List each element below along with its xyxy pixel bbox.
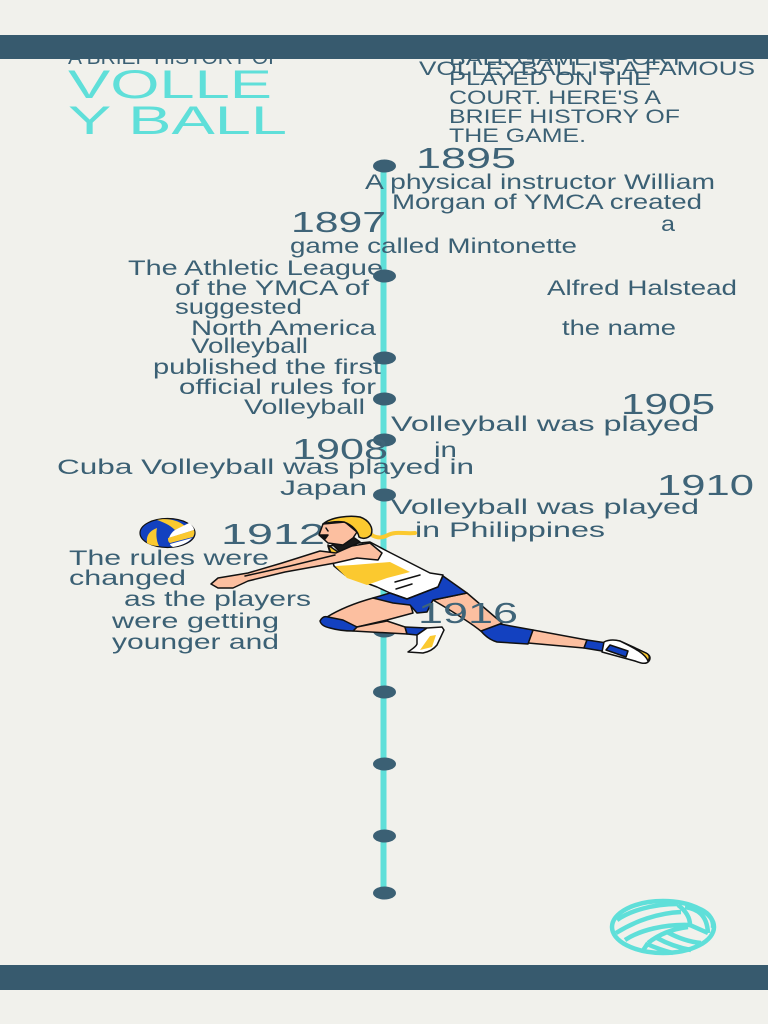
event 1897: Alfred Halstead xyxy=(547,277,737,300)
event 1895: Morgan of YMCA created xyxy=(392,191,702,214)
hair xyxy=(323,516,372,538)
event 1897: Volleyball xyxy=(244,396,365,419)
intro text block: THE GAME. xyxy=(449,125,586,147)
title: a brief history of volleyball: VOLLE xyxy=(68,63,272,107)
event 1908: Japan xyxy=(280,477,367,500)
event 1916 year: 1916 xyxy=(418,598,518,630)
arm separation line xyxy=(245,555,335,576)
event 1912: The rules were xyxy=(69,547,269,570)
event 1912: were getting xyxy=(111,610,279,633)
event 1897: published the first xyxy=(153,356,381,379)
icon: volleyball player xyxy=(211,516,650,663)
front shoe accent xyxy=(420,635,436,650)
event 1905: in xyxy=(434,439,457,462)
timeline axis with markers xyxy=(373,160,396,900)
front sock xyxy=(405,627,427,635)
arms xyxy=(211,543,382,588)
event 1910: Volleyball was played xyxy=(391,496,699,519)
event 1910: in Philippines xyxy=(415,519,605,542)
event 1897: Volleyball xyxy=(191,335,308,358)
event 1908: 1908 xyxy=(292,434,388,466)
back sock xyxy=(584,640,607,651)
face xyxy=(319,522,357,545)
braid xyxy=(368,532,415,537)
event 1895: A physical instructor William xyxy=(365,171,715,194)
tank top fold lines xyxy=(395,575,420,589)
intro text block: BALL GAME SPORT xyxy=(449,48,684,70)
event 1908: Cuba Volleyball was played in xyxy=(57,456,474,479)
event 1897: of the YMCA of xyxy=(175,277,369,300)
event 1910: 1910 xyxy=(657,470,754,502)
back shoe laces xyxy=(606,645,628,657)
back calf xyxy=(528,630,587,648)
back shoe xyxy=(602,640,650,663)
event 1897: the name xyxy=(562,317,676,340)
icon: teal volleyball xyxy=(612,901,714,953)
event 1897: suggested xyxy=(175,296,302,319)
intro text block: PLAYED ON THE xyxy=(449,68,651,90)
event 1895: a xyxy=(661,213,675,236)
top header bar xyxy=(0,35,768,59)
event 1897: official rules for xyxy=(179,376,376,399)
event 1895 xyxy=(290,143,715,258)
front shoe xyxy=(408,627,444,653)
intro text block: VOLLEYBALL IS A FAMOUS xyxy=(419,58,755,80)
bottom footer bar xyxy=(0,965,768,990)
icon: small volleyball xyxy=(140,518,195,548)
mouth xyxy=(320,535,328,539)
title: a brief history of volleyball xyxy=(68,47,287,143)
event 1910 xyxy=(391,470,754,542)
event 1905: Volleyball was played xyxy=(391,413,699,436)
tank top xyxy=(328,542,443,599)
front knee pad xyxy=(320,617,357,631)
front shin xyxy=(353,621,407,634)
intro text block xyxy=(419,48,755,147)
event 1905 xyxy=(391,389,715,462)
event 1912: younger and xyxy=(112,631,279,654)
event 1897 xyxy=(128,207,737,419)
event 1897: The Athletic League xyxy=(128,257,383,280)
title: a brief history of volleyball: Y BALL xyxy=(68,99,287,143)
tank top strap xyxy=(328,545,338,556)
event 1912 xyxy=(69,519,325,654)
eye xyxy=(326,528,328,531)
event 1912: as the players xyxy=(124,588,311,611)
intro text block: COURT. HERE'S A xyxy=(449,87,661,109)
event 1908 xyxy=(57,434,474,500)
event 1897: North America xyxy=(191,317,376,340)
neck xyxy=(330,537,360,552)
event 1895: 1895 xyxy=(416,143,516,175)
front thigh xyxy=(327,598,413,627)
tank top yellow band xyxy=(335,562,410,585)
back shoe accent xyxy=(620,641,649,661)
event 1897: 1897 xyxy=(291,207,386,239)
back thigh xyxy=(433,593,502,632)
event 1895: game called Mintonette xyxy=(290,235,577,258)
event 1905: 1905 xyxy=(621,389,715,421)
shorts xyxy=(373,576,467,613)
intro text block: BRIEF HISTORY OF xyxy=(449,106,680,128)
title: a brief history of volleyball: A BRIEF HISTORY OF xyxy=(68,47,281,69)
back knee pad xyxy=(481,624,533,644)
event 1912: changed xyxy=(69,567,186,590)
event 1912: 1912 xyxy=(221,519,325,551)
